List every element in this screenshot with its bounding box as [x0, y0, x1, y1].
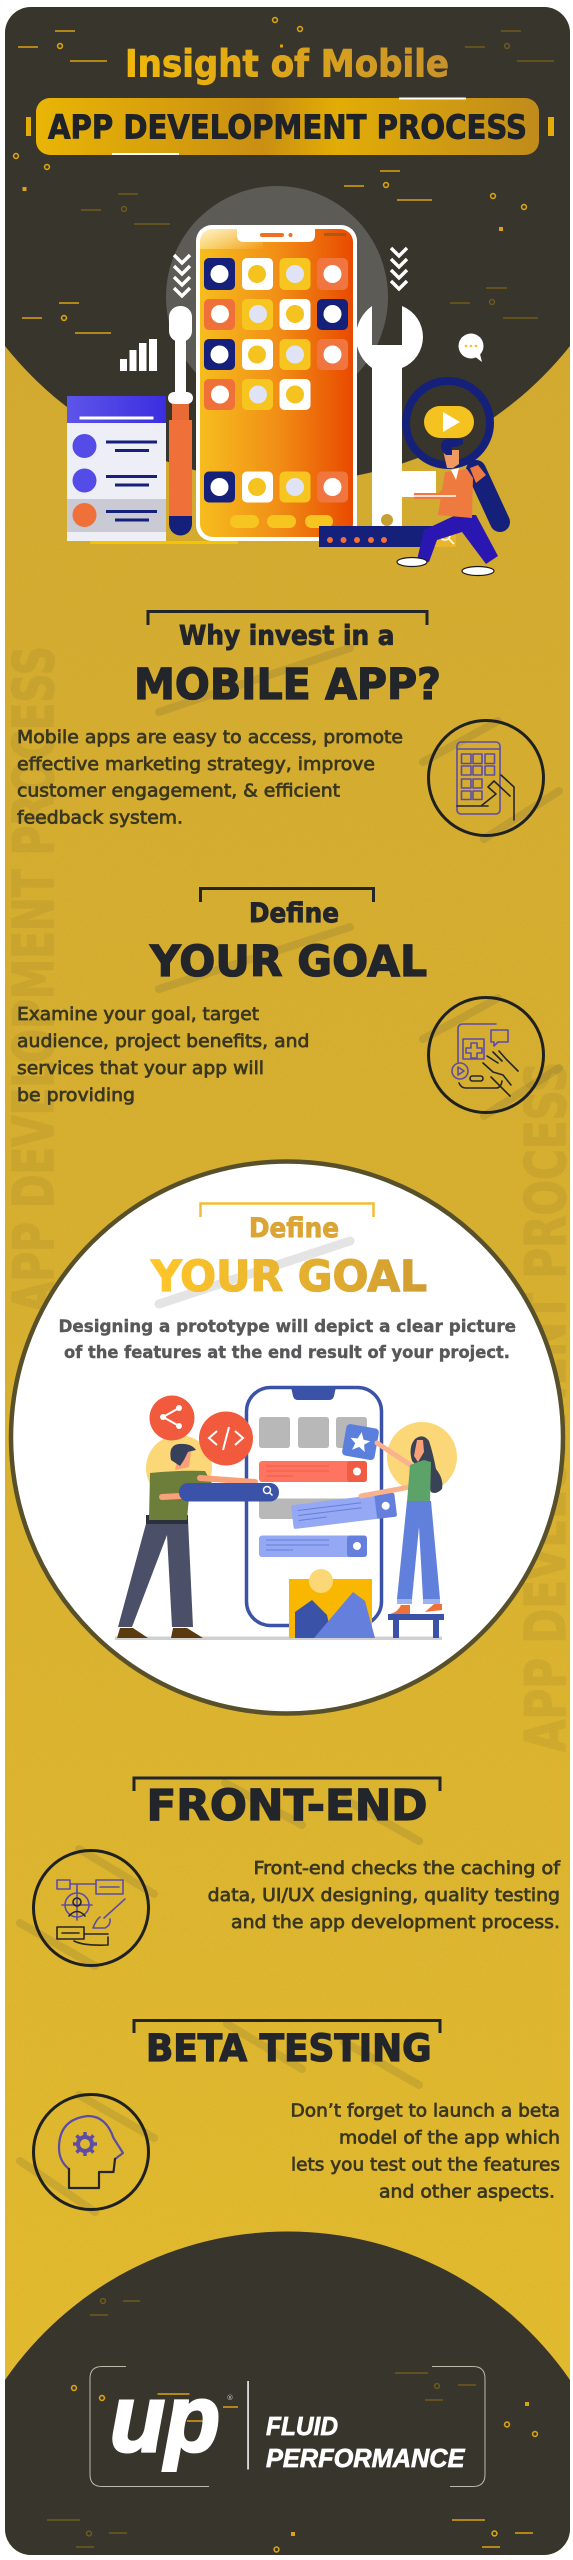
app icon grid — [204, 258, 348, 502]
heading bracket — [200, 1204, 374, 1217]
heading small: Define — [249, 1213, 339, 1244]
heading bracket — [200, 888, 374, 902]
magnifying glass with play button — [406, 381, 500, 522]
section: why invest in a mobile app — [17, 612, 559, 839]
heading small: Why invest in a — [179, 620, 394, 652]
image card — [289, 1569, 375, 1638]
icon: phone in hand — [423, 720, 559, 839]
registered mark: ® — [226, 2394, 234, 2402]
body text: effective marketing strategy, improve — [17, 755, 375, 775]
character — [397, 439, 498, 576]
banner: app development process — [26, 98, 554, 155]
icon: ui/ux design — [20, 1849, 154, 1966]
heading large: YOUR GOAL — [149, 937, 427, 987]
yellow circles — [146, 1435, 212, 1501]
section: define your goal — [17, 888, 559, 1116]
heading small: Define — [249, 898, 339, 929]
title: Insight of Mobile — [125, 42, 449, 86]
dock pills — [230, 515, 333, 528]
heading bracket — [148, 612, 427, 625]
ground line — [115, 1636, 442, 1640]
icon: head with gear — [20, 2094, 154, 2212]
body text: and other aspects. — [379, 2182, 555, 2202]
body text: customer engagement, & efficient — [17, 782, 340, 802]
fluid wordmark: FLUID — [266, 2411, 338, 2441]
list card — [67, 396, 166, 541]
red share badge — [150, 1396, 194, 1440]
body text: and the app development process. — [231, 1913, 560, 1933]
body text — [290, 2102, 560, 2202]
body text: Mobile apps are easy to access, promote — [17, 728, 403, 748]
watermark: left vertical text: APP DEVELOPMENT PROCESS — [2, 646, 67, 1313]
star card — [341, 1423, 380, 1461]
prototype phone — [246, 1387, 382, 1626]
body text: of the features at the end result of your project. — [64, 1343, 510, 1363]
icon: touch screen — [423, 998, 559, 1116]
screwdriver — [168, 306, 193, 536]
chevrons left — [174, 255, 190, 296]
body text — [58, 1317, 516, 1363]
man — [117, 1444, 279, 1638]
tilted blue card — [291, 1493, 397, 1529]
signal bars icon — [120, 339, 157, 371]
body text — [17, 728, 403, 828]
body text: model of the app which — [339, 2128, 560, 2148]
woman — [361, 1436, 444, 1638]
smartphone — [196, 225, 357, 541]
body text: audience, project benefits, and — [17, 1032, 310, 1052]
section: front-end — [20, 1778, 561, 1966]
panel: white prototype circle — [11, 1162, 563, 1714]
body text: lets you test out the features — [291, 2156, 560, 2176]
body text: feedback system. — [17, 808, 183, 828]
body text — [17, 1005, 310, 1106]
logo divider — [247, 2381, 249, 2470]
performance wordmark: PERFORMANCE — [266, 2443, 465, 2473]
search bar — [319, 526, 456, 547]
header dark shape — [5, 7, 570, 482]
logo frame — [90, 2366, 485, 2486]
body text: Designing a prototype will depict a clear picture — [58, 1317, 516, 1337]
body text: Don’t forget to launch a beta — [290, 2102, 560, 2122]
underline — [90, 541, 238, 544]
body text: services that your app will — [17, 1059, 264, 1079]
heading: FRONT-END — [146, 1781, 428, 1831]
heading bracket — [134, 2020, 440, 2033]
logo: up fluid performance — [90, 2366, 485, 2486]
grey circle behind phone — [166, 186, 388, 408]
body text: Examine your goal, target — [17, 1005, 259, 1025]
wrench — [356, 306, 436, 526]
body text: data, UI/UX designing, quality testing — [208, 1886, 560, 1906]
footer dark shape — [5, 2232, 570, 2555]
body text: be providing — [17, 1086, 135, 1106]
heading large: YOUR GOAL — [150, 1252, 427, 1302]
header decorative dashes and rings — [14, 18, 554, 333]
up mark: up — [110, 2366, 220, 2472]
footer decorative dashes and rings — [47, 2299, 537, 2552]
speech bubble — [458, 334, 484, 362]
red code badge — [199, 1412, 253, 1466]
body text: Front-end checks the caching of — [254, 1859, 561, 1879]
hero illustration: phone and tools — [67, 186, 500, 576]
chevrons right — [391, 248, 407, 289]
illustration: team building an app — [115, 1387, 457, 1640]
section: beta testing — [20, 2020, 560, 2212]
heading: BETA TESTING — [146, 2027, 432, 2070]
heading large: MOBILE APP? — [134, 660, 441, 710]
heading bracket — [134, 1778, 440, 1791]
body text — [208, 1859, 561, 1933]
